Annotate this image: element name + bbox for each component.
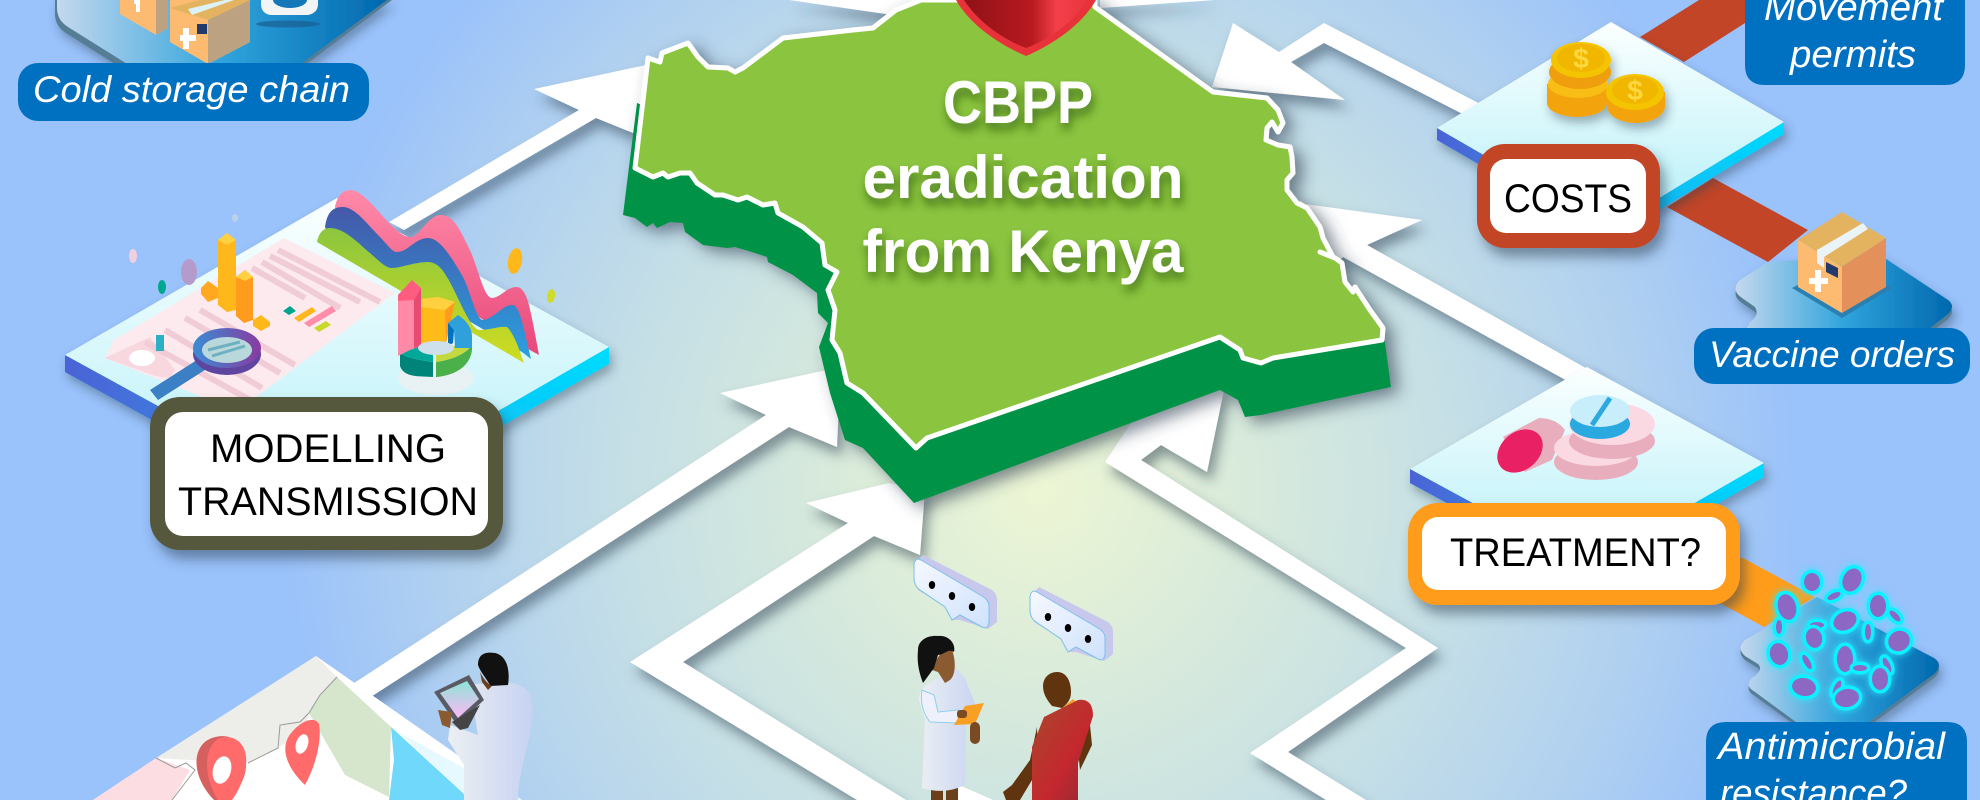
connector: costs to vaccine orders bbox=[1667, 178, 1808, 262]
document page with text lines bbox=[105, 238, 395, 400]
panel: costs bbox=[1437, 22, 1784, 248]
label: treatment bbox=[1408, 503, 1740, 605]
icon: speech bubble left bbox=[913, 555, 997, 629]
platform: treatment bbox=[1410, 367, 1764, 579]
icon: gold coin stacks bbox=[1547, 42, 1665, 123]
label: vaccine orders: Vaccine orders bbox=[1709, 334, 1955, 375]
label: costs bbox=[1477, 144, 1660, 248]
connector: costs to movement permits bbox=[1640, 0, 1770, 62]
label: treatment: TREATMENT? bbox=[1450, 531, 1701, 575]
label: costs: COSTS bbox=[1504, 177, 1632, 221]
icon: magnifying glass bbox=[150, 328, 261, 400]
connector: treatment to antimicrobial resistance bbox=[1720, 557, 1815, 627]
label: antimicrobial resistance: Antimicrobial bbox=[1716, 726, 1947, 768]
person: scientist with tablet bbox=[434, 653, 533, 800]
label: modelling transmission: MODELLING bbox=[210, 427, 446, 471]
panel: vaccine orders bbox=[1694, 212, 1970, 384]
title: CBPP eradication from Kenya: from Kenya bbox=[862, 218, 1184, 285]
panel: modelling transmission bbox=[65, 190, 609, 550]
person: female veterinarian with clipboard bbox=[918, 636, 984, 800]
platform: cold storage bbox=[55, 0, 392, 80]
arrow: modelling transmission to map bbox=[389, 65, 660, 230]
label: vaccine orders bbox=[1694, 328, 1970, 384]
chart: wave ribbons bbox=[317, 190, 539, 363]
panel: community engagement bbox=[913, 555, 1113, 800]
label: movement permits: permits bbox=[1789, 34, 1916, 76]
platform: modelling bbox=[65, 198, 609, 522]
label: movement permits bbox=[1745, 0, 1965, 85]
icon: gold coin stacks: $ bbox=[1627, 75, 1643, 106]
map top face bbox=[635, 0, 1383, 448]
label: cold storage chain bbox=[18, 63, 369, 121]
map body: extrusion and top face bbox=[623, 0, 1391, 503]
title: CBPP eradication from Kenya bbox=[862, 69, 1184, 285]
label: modelling transmission: TRANSMISSION bbox=[178, 480, 478, 524]
platform: vaccine orders bbox=[1735, 255, 1952, 337]
icon: map pin right bbox=[285, 720, 320, 785]
arrow: surveillance map to centre bbox=[351, 370, 840, 700]
bar chart: orange 3D bars bbox=[201, 233, 270, 331]
chart: ring and 3D columns bbox=[398, 280, 474, 395]
panel: treatment bbox=[1408, 367, 1764, 605]
map extrusion bbox=[623, 103, 1391, 503]
person: herder in red robe bbox=[1003, 672, 1093, 800]
icon: red shield bbox=[956, 0, 1096, 56]
title: CBPP eradication from Kenya: CBPP bbox=[943, 69, 1093, 136]
icon: gold coin stacks: $ bbox=[1573, 43, 1589, 74]
label: modelling transmission bbox=[150, 397, 503, 550]
arrow: costs to map bbox=[1212, 23, 1490, 128]
title: CBPP eradication from Kenya: eradication bbox=[862, 144, 1184, 211]
icon: vaccine carton bbox=[1792, 212, 1892, 318]
map base bbox=[93, 656, 522, 800]
floating dots bbox=[129, 214, 556, 304]
arrow: treatment to map bbox=[1300, 200, 1600, 399]
icon: white vaccine freezer unit bbox=[256, 0, 320, 28]
platform: antimicrobial resistance bbox=[1740, 597, 1939, 729]
panel: Kenya map bbox=[623, 0, 1391, 503]
arrow: bottom-right zigzag path bbox=[1105, 385, 1438, 800]
arrow: community path with left turn bbox=[630, 483, 925, 800]
icon: glowing bacteria bbox=[1767, 565, 1914, 709]
icon: map pin left bbox=[196, 736, 246, 800]
platform: costs bbox=[1437, 22, 1784, 240]
arrow: top right, clipped bbox=[1100, 0, 1215, 8]
panel: movement permits bbox=[1745, 0, 1965, 85]
label: cold storage chain: Cold storage chain bbox=[33, 69, 350, 110]
icon: capsule and tablets bbox=[1489, 395, 1655, 482]
arrow: top left, clipped bbox=[789, 0, 915, 16]
platform corner under people bbox=[950, 785, 993, 800]
label: antimicrobial resistance bbox=[1706, 722, 1967, 800]
panel: surveillance map and scientist bbox=[93, 653, 533, 800]
icon: speech bubble right bbox=[1029, 587, 1113, 661]
arrows: white pathways leading to the map bbox=[351, 0, 1600, 800]
panel: antimicrobial resistance bbox=[1706, 565, 1967, 800]
panel: cold storage chain bbox=[18, 0, 392, 121]
icon: medical boxes bbox=[120, 0, 250, 64]
